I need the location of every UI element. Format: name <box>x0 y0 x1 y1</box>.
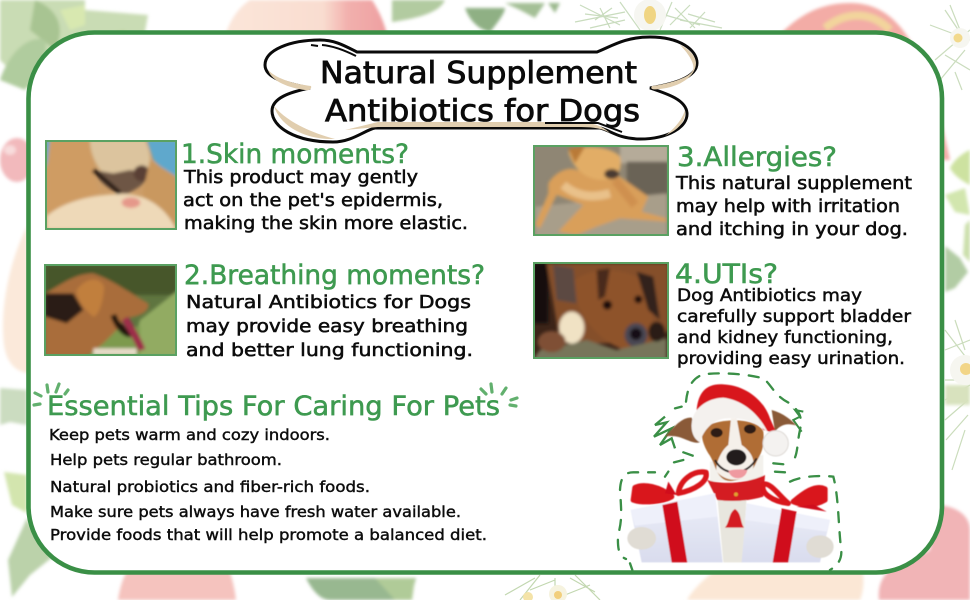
body text: and itching in your dog. <box>676 219 908 240</box>
section 3: allergies <box>534 142 912 240</box>
body text: and better lung functioning. <box>186 340 473 361</box>
section 1: skin <box>45 139 468 234</box>
ears <box>665 418 700 443</box>
apple: left edge red <box>0 138 34 182</box>
body text <box>183 167 468 234</box>
photo: brindle dog lying <box>533 263 668 360</box>
leaves: right edge <box>945 150 970 292</box>
body text: Dog Antibiotics may <box>677 286 862 306</box>
gift left <box>631 472 723 562</box>
body text: may help with irritation <box>676 196 900 217</box>
flower: right edge <box>945 320 970 470</box>
bone highlights <box>311 45 622 132</box>
section 4: UTIs <box>533 259 911 369</box>
apple: bottom pale <box>687 560 863 600</box>
flower: top centre <box>575 0 722 31</box>
photo frame <box>534 146 668 235</box>
dashed outline <box>618 373 841 570</box>
apple: bottom right red <box>879 505 970 600</box>
body text: act on the pet's epidermis, <box>183 190 443 211</box>
neck <box>710 455 763 482</box>
tips list <box>49 426 487 544</box>
photo: scratching dog <box>534 145 668 237</box>
nose and mouth <box>726 449 746 465</box>
photo: dog licking skin <box>45 140 178 230</box>
tips list: Make sure pets always have fresh water available. <box>50 503 461 521</box>
leaves: top centre <box>392 0 560 32</box>
tips list: Keep pets warm and cozy indoors. <box>49 426 330 444</box>
heading: 1.Skin moments? <box>181 139 409 170</box>
leaves: bottom centre <box>306 578 416 600</box>
body <box>717 497 747 562</box>
flower: bottom centre <box>505 575 600 600</box>
heading: 3.Allergies? <box>677 142 837 173</box>
heading: 4.UTIs? <box>675 259 778 290</box>
tips list: Provide foods that will help promote a balanced diet. <box>50 526 487 544</box>
bone shape <box>265 37 697 142</box>
body text: and kidney functioning, <box>677 328 893 348</box>
body text: making the skin more elastic. <box>184 213 468 234</box>
body text: carefully support bladder <box>677 307 911 327</box>
apple: left edge pale <box>3 226 30 373</box>
leaves: left edge <box>0 388 55 597</box>
apple: top right <box>758 3 950 160</box>
body text <box>186 292 473 361</box>
bone shading <box>268 45 696 139</box>
photo: panting dog <box>45 265 178 357</box>
body text <box>677 286 911 369</box>
body text: providing easy urination. <box>677 349 905 369</box>
tips list: Help pets regular bathroom. <box>50 451 282 469</box>
collar <box>707 475 765 501</box>
title text <box>320 56 640 129</box>
paws <box>627 527 656 550</box>
gift right <box>742 484 830 562</box>
christmas dog holding gifts <box>618 373 841 570</box>
tips heading: Essential Tips For Caring For Pets <box>47 391 500 422</box>
eyes <box>711 428 723 437</box>
leaves: top left <box>0 0 148 90</box>
title text: Natural Supplement <box>320 56 637 91</box>
section 2: breathing <box>45 260 485 361</box>
body text: This natural supplement <box>675 173 912 194</box>
apple: bottom left <box>118 560 236 600</box>
body text <box>675 173 912 240</box>
body text: This product may gently <box>183 167 418 188</box>
body text: may provide easy breathing <box>186 316 468 337</box>
title text: Antibiotics for Dogs <box>325 94 640 129</box>
bell <box>725 509 744 528</box>
tips list: Natural probiotics and fiber-rich foods. <box>50 478 370 496</box>
head <box>702 420 764 481</box>
photo frame <box>45 265 176 355</box>
apple: top centre <box>222 0 390 60</box>
body text: Natural Antibiotics for Dogs <box>186 292 471 313</box>
photo frame <box>46 141 176 229</box>
icon: sparkle left <box>34 384 68 405</box>
tips section <box>34 384 517 544</box>
photo frame <box>534 263 668 358</box>
title bone badge <box>265 37 697 142</box>
icon: sparkle right <box>481 384 517 406</box>
scribble green <box>654 417 675 448</box>
santa hat <box>697 384 777 433</box>
heading: 2.Breathing moments? <box>184 260 485 291</box>
flower: top right <box>930 5 970 90</box>
